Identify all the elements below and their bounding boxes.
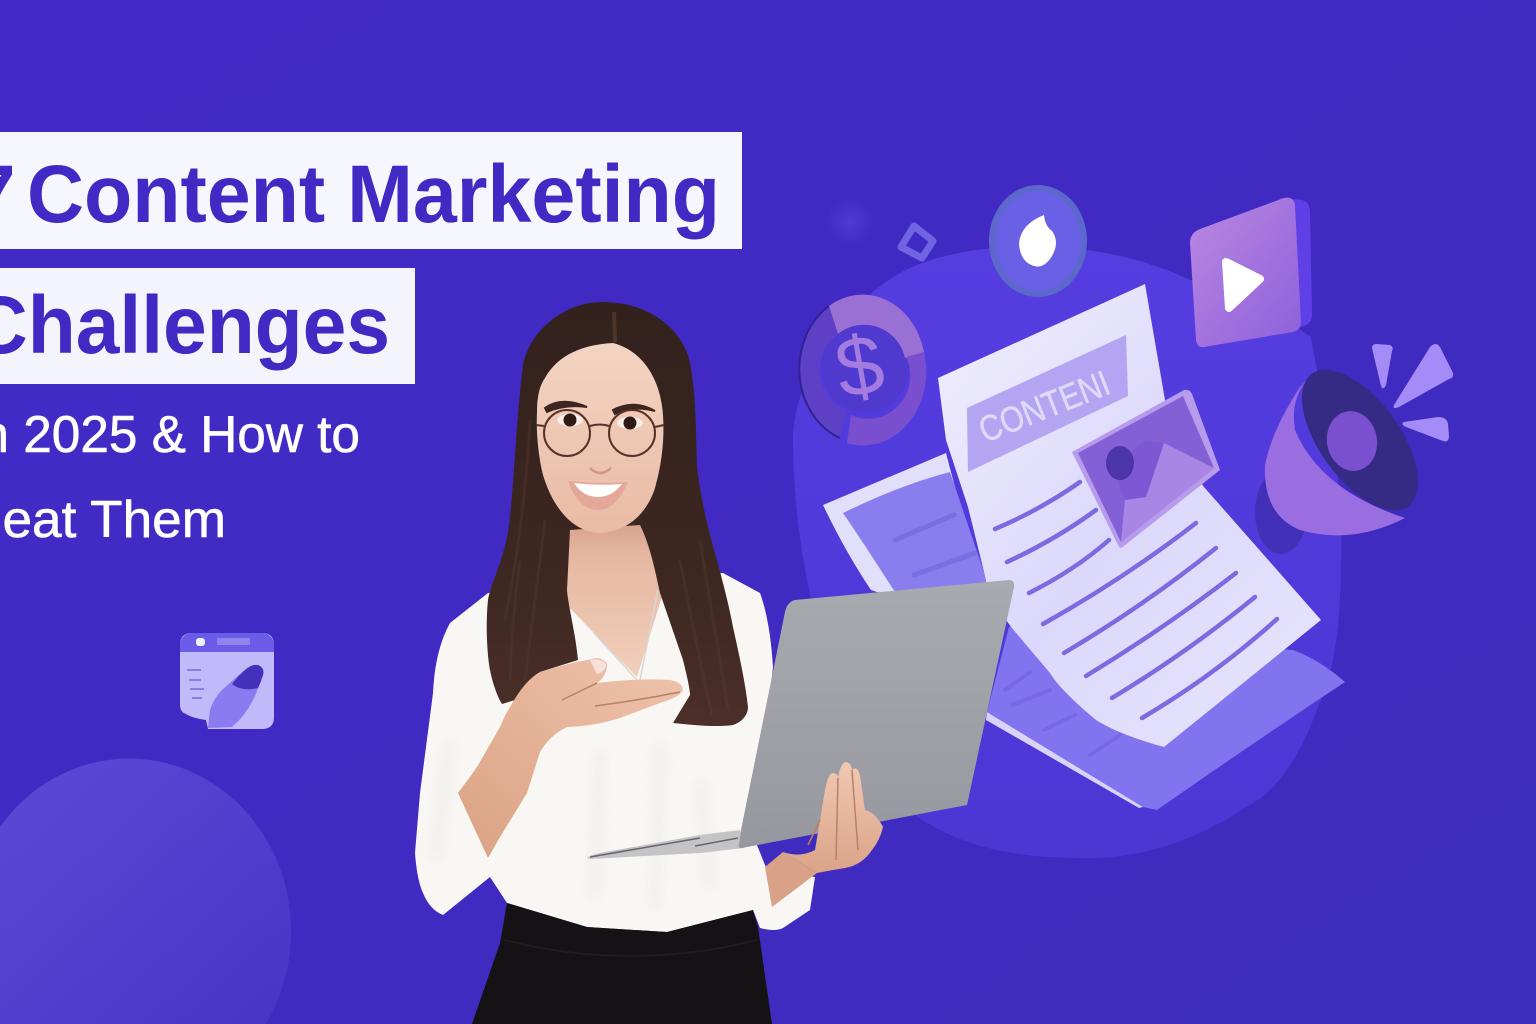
laptop [587, 580, 1014, 859]
decorative circle bottom left [0, 759, 291, 1024]
skirt [472, 903, 772, 1024]
heading line 1: Content Marketing [27, 149, 720, 240]
icon: megaphone [1255, 344, 1453, 554]
document text lines [995, 482, 1277, 718]
blouse [415, 573, 815, 932]
icon: dollar donut chart [799, 295, 926, 445]
content banner [967, 335, 1128, 472]
hair strands [505, 420, 728, 715]
back page sheet bottom [986, 627, 1345, 810]
facial features [536, 402, 664, 510]
hair [487, 302, 748, 726]
collar fold lines [593, 590, 658, 680]
blouse folds [435, 740, 710, 910]
title: white highlighted heading [0, 132, 742, 384]
back page sheet top [823, 453, 990, 620]
icon: quote badge [992, 188, 1084, 294]
icon: video play tile [1190, 198, 1312, 347]
right hand holding laptop [765, 762, 883, 907]
subtitle [0, 406, 360, 549]
person: woman with laptop [415, 302, 1014, 1024]
illustration: content marketing scene [793, 188, 1453, 858]
hair part [614, 312, 615, 342]
face [537, 343, 663, 533]
glow dot [826, 198, 874, 246]
neck and chest [562, 505, 664, 677]
background blob [793, 246, 1342, 858]
dollar sign: $ [828, 316, 891, 416]
left arm and gesture hand [458, 658, 683, 858]
icon: image card [1072, 390, 1220, 548]
icon: small app window with pointer [180, 633, 274, 729]
megaphone sound rays [1372, 344, 1453, 441]
icon: small diamond outline [901, 226, 933, 258]
content banner: CONTENI [973, 362, 1115, 450]
main document page [938, 284, 1321, 747]
